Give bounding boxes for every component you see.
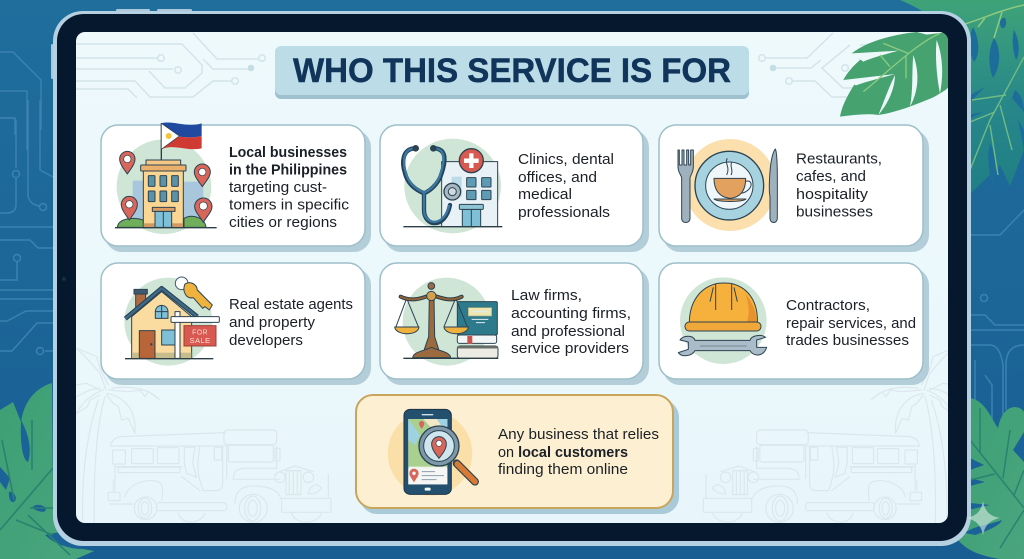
- card text: and professional: [511, 324, 625, 340]
- card text: Restaurants,: [796, 152, 882, 168]
- screen: [76, 32, 948, 523]
- card text: service providers: [511, 341, 629, 357]
- card text: [786, 298, 916, 349]
- card text: on local customers: [498, 445, 628, 461]
- icon: hard hat and wrench: [678, 277, 767, 364]
- circuit lines, top left: [76, 33, 265, 98]
- card text: [229, 145, 349, 231]
- card text: and property: [229, 315, 316, 331]
- card text: [229, 297, 353, 349]
- leaf: on screen top right: [840, 32, 948, 117]
- leaf: top right outer: [900, 0, 1024, 197]
- card: contractors: [659, 263, 929, 385]
- screen decoration: circuit and line art: [76, 32, 953, 523]
- leaf: bottom right outer: [958, 398, 1024, 559]
- card text: [511, 288, 631, 357]
- card text: finding them online: [498, 462, 628, 478]
- icon: house, key and for sale sign: FOR: [192, 329, 208, 336]
- icon: phone with map and magnifier: [388, 409, 475, 496]
- jeepney and palm, right: [703, 348, 953, 523]
- title banner: [275, 46, 749, 99]
- jeepney and palm, left: [76, 348, 331, 523]
- card text: Clinics, dental: [518, 152, 614, 168]
- card text: repair services, and: [786, 316, 916, 332]
- card: clinics: [380, 125, 649, 252]
- icon: scales of justice and books: [395, 278, 498, 366]
- card text: businesses: [796, 204, 873, 220]
- card text: cities or regions: [229, 215, 337, 231]
- background circuit traces, left: [0, 52, 53, 354]
- background circuit traces, right: [971, 210, 1024, 420]
- circuit lines, top right: [758, 32, 867, 98]
- card text: Local businesses: [229, 145, 347, 161]
- card: law firms: [380, 263, 649, 385]
- icon: plate, cup, fork and knife: [678, 139, 777, 231]
- card text: tomers in specific: [229, 198, 349, 214]
- card text: Real estate agents: [229, 297, 353, 313]
- card text: [518, 152, 614, 221]
- card: local businesses: [101, 123, 371, 252]
- icon: building with flag and map pins: [115, 123, 217, 234]
- card text: Any business that relies: [498, 427, 659, 443]
- card text: Law firms,: [511, 288, 582, 304]
- title: WHO THIS SERVICE IS FOR: [293, 52, 731, 90]
- icon: stethoscope and clinic: [403, 139, 502, 233]
- card text: trades businesses: [786, 333, 909, 349]
- card text: in the Philippines: [229, 162, 347, 178]
- icon: sparkle watermark: [966, 501, 1000, 535]
- card text: [796, 152, 882, 220]
- card text: accounting firms,: [511, 306, 631, 322]
- icon: house, key and for sale sign: SALE: [190, 336, 210, 345]
- card text: targeting cust-: [229, 180, 327, 196]
- card text: developers: [229, 333, 303, 349]
- card: restaurants: [659, 125, 929, 252]
- card text: [498, 427, 659, 478]
- leaf: bottom left outer: [0, 383, 94, 559]
- card text: medical: [518, 187, 572, 203]
- icon: house, key and for sale sign: [124, 277, 219, 366]
- card text: Contractors,: [786, 298, 870, 314]
- card: real estate: [101, 263, 371, 385]
- card: any local business (highlight): [356, 395, 679, 514]
- card text: hospitality: [796, 187, 869, 203]
- card text: offices, and: [518, 170, 597, 186]
- card text: professionals: [518, 205, 610, 221]
- card text: cafes, and: [796, 169, 866, 185]
